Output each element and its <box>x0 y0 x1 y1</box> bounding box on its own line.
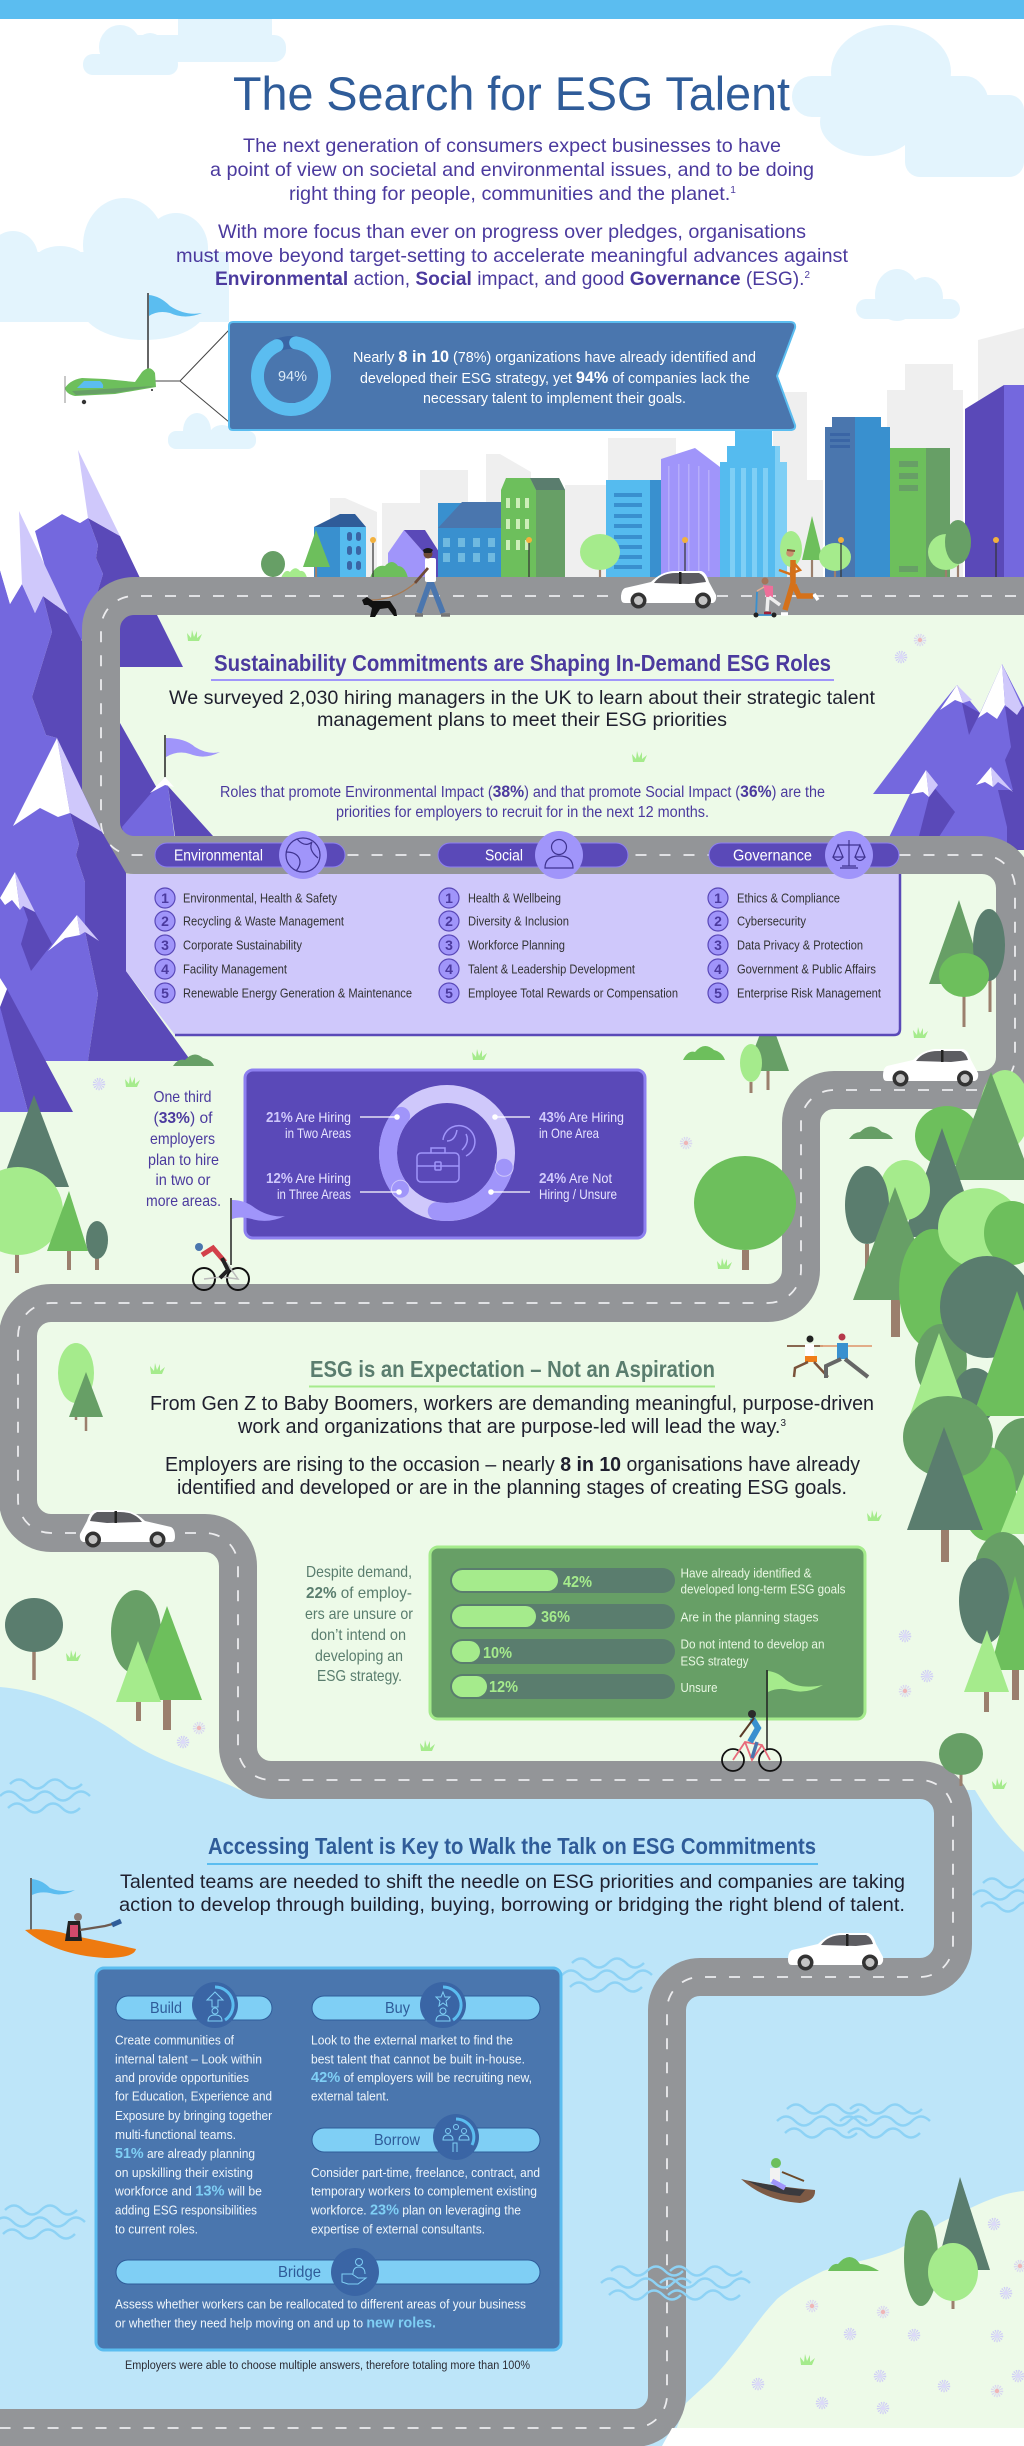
forest: right side <box>845 1070 1024 1712</box>
bar: 12% <box>450 1674 675 1699</box>
building: purple glass tower <box>965 385 1024 578</box>
title: The Search for ESG Talent <box>233 67 790 120</box>
footnote: Employers were able to choose multiple answers, therefore totaling more than 100% <box>125 2360 530 2372</box>
white strip below land <box>662 2428 1024 2446</box>
list: social: 1 <box>445 890 453 906</box>
flag on small peak <box>165 735 220 777</box>
despite demand note: ers are unsure or <box>305 1606 414 1623</box>
one third note: more areas. <box>146 1193 221 1210</box>
build text: Exposure by bringing together <box>115 2109 272 2123</box>
despite demand note: ESG strategy. <box>317 1668 402 1685</box>
roles statement: Roles that promote Environmental Impact (38%) and that promote Social Impact (36%) are the <box>220 782 825 801</box>
pill: Build <box>116 1982 272 2028</box>
borrow text <box>310 2166 540 2236</box>
clouds <box>0 19 1024 449</box>
list: environmental <box>155 888 412 1003</box>
city skyline <box>261 328 1024 578</box>
list: social: 2 <box>445 913 453 929</box>
trees: middle left <box>0 1095 108 1273</box>
list: environmental: 4 <box>161 961 169 977</box>
list: governance: 1 <box>714 890 722 906</box>
list: environmental: Facility Management <box>183 962 287 976</box>
despite demand note: don’t intend on <box>311 1627 406 1644</box>
pill: Social <box>438 831 628 879</box>
road <box>0 596 1024 2428</box>
list: governance: Government & Public Affairs <box>737 962 876 976</box>
list: environmental: 3 <box>161 937 169 953</box>
one third note: (33%) of <box>154 1110 213 1127</box>
donut labels: Hiring / Unsure <box>539 1186 617 1202</box>
section 1 heading: Sustainability Commitments are Shaping In-Demand ESG Roles <box>214 650 831 676</box>
despite demand note: developing an <box>315 1648 403 1665</box>
list: social: Workforce Planning <box>468 938 565 952</box>
pill: Environmental: Environmental <box>174 848 263 864</box>
donut labels: in Two Areas <box>285 1125 351 1141</box>
list: governance: 4 <box>714 961 722 977</box>
list: environmental: 5 <box>161 985 169 1001</box>
borrow text: workforce. 23% plan on leveraging the <box>310 2202 521 2218</box>
section 3 heading: Accessing Talent is Key to Walk the Talk on ESG Commitments <box>208 1833 816 1859</box>
list: governance: Ethics & Compliance <box>737 892 840 906</box>
callout banner <box>229 322 795 430</box>
bar labels: Do not intend to develop an <box>680 1636 824 1652</box>
panel: role lists <box>126 874 900 1035</box>
list: environmental: Environmental, Health & Safety <box>183 892 338 906</box>
section 2 text: From Gen Z to Baby Boomers, workers are demanding meaningful, purpose-driven <box>150 1393 874 1415</box>
banner text: necessary talent to implement their goals. <box>423 390 686 407</box>
bar: 12%: 12% <box>489 1679 518 1696</box>
despite demand note: 22% of employ- <box>306 1585 412 1602</box>
trees: section two left <box>58 1343 103 1431</box>
pill: Bridge: Bridge <box>278 2264 321 2281</box>
build text: 51% are already planning <box>115 2145 255 2162</box>
pill: Environmental <box>155 831 345 879</box>
intro text: With more focus than ever on progress over pledges, organisations <box>218 221 806 243</box>
building: blue block <box>438 502 501 578</box>
water <box>0 1687 1024 2446</box>
bar labels: Are in the planning stages <box>680 1610 819 1624</box>
list: environmental: Recycling & Waste Management <box>183 914 344 928</box>
build text: for Education, Experience and <box>115 2090 272 2104</box>
bar: 42%: 42% <box>563 1574 592 1591</box>
pill: Borrow: Borrow <box>374 2132 421 2149</box>
banner text <box>353 347 756 407</box>
bar labels: Have already identified & <box>680 1566 812 1580</box>
intro text: The next generation of consumers expect businesses to have <box>243 135 781 157</box>
one third note: One third <box>154 1089 212 1106</box>
build text: Create communities of <box>115 2034 234 2048</box>
list: environmental: 2 <box>161 913 169 929</box>
car: lower bend <box>788 1933 883 1970</box>
grass tufts <box>66 630 1007 2365</box>
building: purple tower <box>661 448 720 578</box>
list: social: Talent & Leadership Development <box>468 962 635 976</box>
bar: 36% <box>450 1604 675 1629</box>
intro text: 1 <box>730 185 736 196</box>
pill: Build: Build <box>150 2000 182 2017</box>
one third note: in two or <box>156 1172 211 1189</box>
buy text: Look to the external market to find the <box>311 2034 513 2048</box>
section 2 text: Employers are rising to the occasion – nearly 8 in 10 organisations have already <box>165 1454 860 1476</box>
yoga figures <box>787 1334 872 1378</box>
donut labels <box>266 1109 624 1202</box>
section 2 text <box>150 1393 874 1499</box>
list: social: 4 <box>445 961 453 977</box>
car: top road <box>621 571 716 608</box>
list: social: 3 <box>445 937 453 953</box>
borrow text: temporary workers to complement existing <box>311 2184 537 2198</box>
list: governance: 2 <box>714 913 722 929</box>
build text: multi-functional teams. <box>115 2128 236 2142</box>
list: governance: Enterprise Risk Management <box>737 986 881 1000</box>
canoeist <box>741 2158 815 2203</box>
section 3 text <box>119 1871 905 1916</box>
list: social: 5 <box>445 985 453 1001</box>
trees: lakeside left <box>5 1590 202 1730</box>
flowers <box>95 636 1024 2412</box>
plane body <box>65 368 156 404</box>
tow lines <box>155 330 229 422</box>
building: blue tower <box>606 480 662 578</box>
one third note: employers <box>150 1131 215 1148</box>
donut labels: 21% Are Hiring <box>266 1109 351 1126</box>
right mountains <box>873 664 1024 850</box>
pill: Borrow <box>312 2114 540 2160</box>
icon: briefcase and globe <box>417 1126 475 1182</box>
build text: internal talent – Look within <box>115 2052 262 2066</box>
donut labels: 43% Are Hiring <box>539 1109 624 1126</box>
person walking dog <box>362 548 450 617</box>
pill: Social: Social <box>485 848 523 864</box>
banner text: Nearly 8 in 10 (78%) organizations have already identified and <box>353 347 756 366</box>
building: green tower <box>890 448 950 578</box>
building: sky tower <box>720 430 787 578</box>
building: blue house <box>314 514 366 578</box>
car: left bend <box>80 1510 175 1548</box>
roles statement <box>220 782 825 821</box>
build text: to current roles. <box>115 2222 198 2236</box>
section 1 intro: management plans to meet their ESG priorities <box>317 709 727 731</box>
pill: Governance <box>709 831 899 879</box>
section 1 intro: We surveyed 2,030 hiring managers in the UK to learn about their strategic talent <box>169 687 876 709</box>
roles statement: priorities for employers to recruit for in the next 12 months. <box>336 804 709 821</box>
list: governance: Cybersecurity <box>737 914 807 928</box>
list: environmental: Corporate Sustainability <box>183 938 303 952</box>
donut labels: 24% Are Not <box>539 1170 612 1187</box>
bridge text: or whether they need help moving on and up to new roles. <box>115 2314 436 2332</box>
donut 94% <box>253 338 329 414</box>
list: governance: 3 <box>714 937 722 953</box>
list: governance: 5 <box>714 985 722 1001</box>
borrow text: Consider part-time, freelance, contract, and <box>311 2166 540 2180</box>
pill: Bridge <box>116 2248 540 2296</box>
plane towing banner <box>65 293 229 422</box>
section 3 text: Talented teams are needed to shift the needle on ESG priorities and companies are taking <box>120 1871 905 1893</box>
list: social: Health & Wellbeing <box>468 892 561 906</box>
list: social <box>439 888 678 1003</box>
pill: Buy <box>312 1982 540 2028</box>
bar: 36%: 36% <box>541 1609 570 1626</box>
list: environmental: Renewable Energy Generation & Maintenance <box>183 986 412 1000</box>
flag pole and flag <box>148 293 202 371</box>
build text: and provide opportunities <box>115 2071 249 2085</box>
leader lines <box>360 1115 530 1194</box>
bar labels: developed long-term ESG goals <box>680 1582 846 1596</box>
child on scooter and runner <box>754 549 818 618</box>
section 2 heading: ESG is an Expectation – Not an Aspiration <box>310 1356 715 1382</box>
intro text: 2 <box>805 270 810 281</box>
list: governance <box>708 888 881 1003</box>
section 2 text: work and organizations that are purpose-led will lead the way. <box>238 1416 784 1438</box>
top bar <box>0 0 1024 19</box>
building: dark blue tower <box>825 417 890 578</box>
donut labels: in Three Areas <box>277 1186 351 1202</box>
street trees and lamps <box>261 516 999 578</box>
buy text: best talent that cannot be built in-house. <box>311 2052 525 2066</box>
buy text: external talent. <box>311 2090 389 2104</box>
donut chart <box>388 1094 506 1212</box>
section 3 text: action to develop through building, buying, borrowing or bridging the right blend of talent. <box>119 1894 905 1916</box>
build text: adding ESG responsibilities <box>115 2204 257 2218</box>
bar labels: Unsure <box>680 1680 718 1695</box>
intro text <box>176 135 849 290</box>
section 2 text: 3 <box>780 1418 786 1429</box>
despite demand note <box>305 1564 414 1685</box>
trees and bushes: upper right <box>173 900 1005 1139</box>
pill: Buy: Buy <box>385 2000 410 2017</box>
rear left mountains <box>35 450 213 840</box>
list: governance: Data Privacy & Protection <box>737 938 863 952</box>
bridge text <box>115 2298 526 2332</box>
tree near lower section right <box>939 1733 983 1786</box>
intro text: a point of view on societal and environmental issues, and to be doing <box>210 159 814 181</box>
pill: Governance: Governance <box>733 848 812 864</box>
borrow text: expertise of external consultants. <box>311 2222 485 2236</box>
bridge text: Assess whether workers can be reallocated to different areas of your business <box>115 2298 526 2312</box>
panel: hiring donut chart <box>245 1070 645 1238</box>
section 1 intro <box>169 687 876 731</box>
intro text: Environmental action, Social impact, and good Governance (ESG). <box>215 268 806 290</box>
one third note <box>146 1089 221 1210</box>
build text <box>114 2034 272 2236</box>
kayaker with blue flag <box>25 1878 136 1958</box>
list: environmental: 1 <box>161 890 169 906</box>
trees: bottom right land <box>828 2177 990 2309</box>
donut labels: in One Area <box>539 1125 599 1141</box>
buy text: 42% of employers will be recruiting new, <box>311 2069 532 2086</box>
intro text: must move beyond target-setting to accelerate meaningful advances against <box>176 245 849 267</box>
single round tree <box>694 1156 796 1270</box>
cyclist with lavender flag <box>193 1198 285 1290</box>
build text: on upskilling their existing <box>115 2166 253 2180</box>
cyclist with green flag <box>722 1670 823 1771</box>
despite demand note: Despite demand, <box>306 1564 412 1581</box>
section 2 text: identified and developed or are in the planning stages of creating ESG goals. <box>177 1477 847 1499</box>
intro text: right thing for people, communities and the planet. <box>289 183 722 205</box>
bar labels: ESG strategy <box>680 1654 749 1668</box>
banner text: developed their ESG strategy, yet 94% of companies lack the <box>360 368 750 387</box>
building: purple house <box>388 530 441 578</box>
build text: workforce and 13% will be <box>114 2182 262 2200</box>
panel: ESG strategy bar chart <box>430 1547 865 1719</box>
list: social: Employee Total Rewards or Compensation <box>468 986 678 1000</box>
donut 94%: 94% <box>278 368 307 385</box>
bar labels <box>680 1566 846 1695</box>
building: green block <box>501 478 565 578</box>
front left mountains <box>0 511 191 1112</box>
bar: 10%: 10% <box>483 1645 512 1662</box>
water waves <box>0 1780 1024 2300</box>
bar: 10% <box>450 1639 675 1664</box>
list: social: Diversity & Inclusion <box>468 914 569 928</box>
donut labels: 12% Are Hiring <box>266 1170 351 1187</box>
car: right bend <box>883 1049 978 1086</box>
bar: 42% <box>450 1568 675 1593</box>
panel: build buy borrow bridge <box>96 1968 561 2350</box>
buy text <box>311 2034 532 2104</box>
one third note: plan to hire <box>148 1152 219 1169</box>
